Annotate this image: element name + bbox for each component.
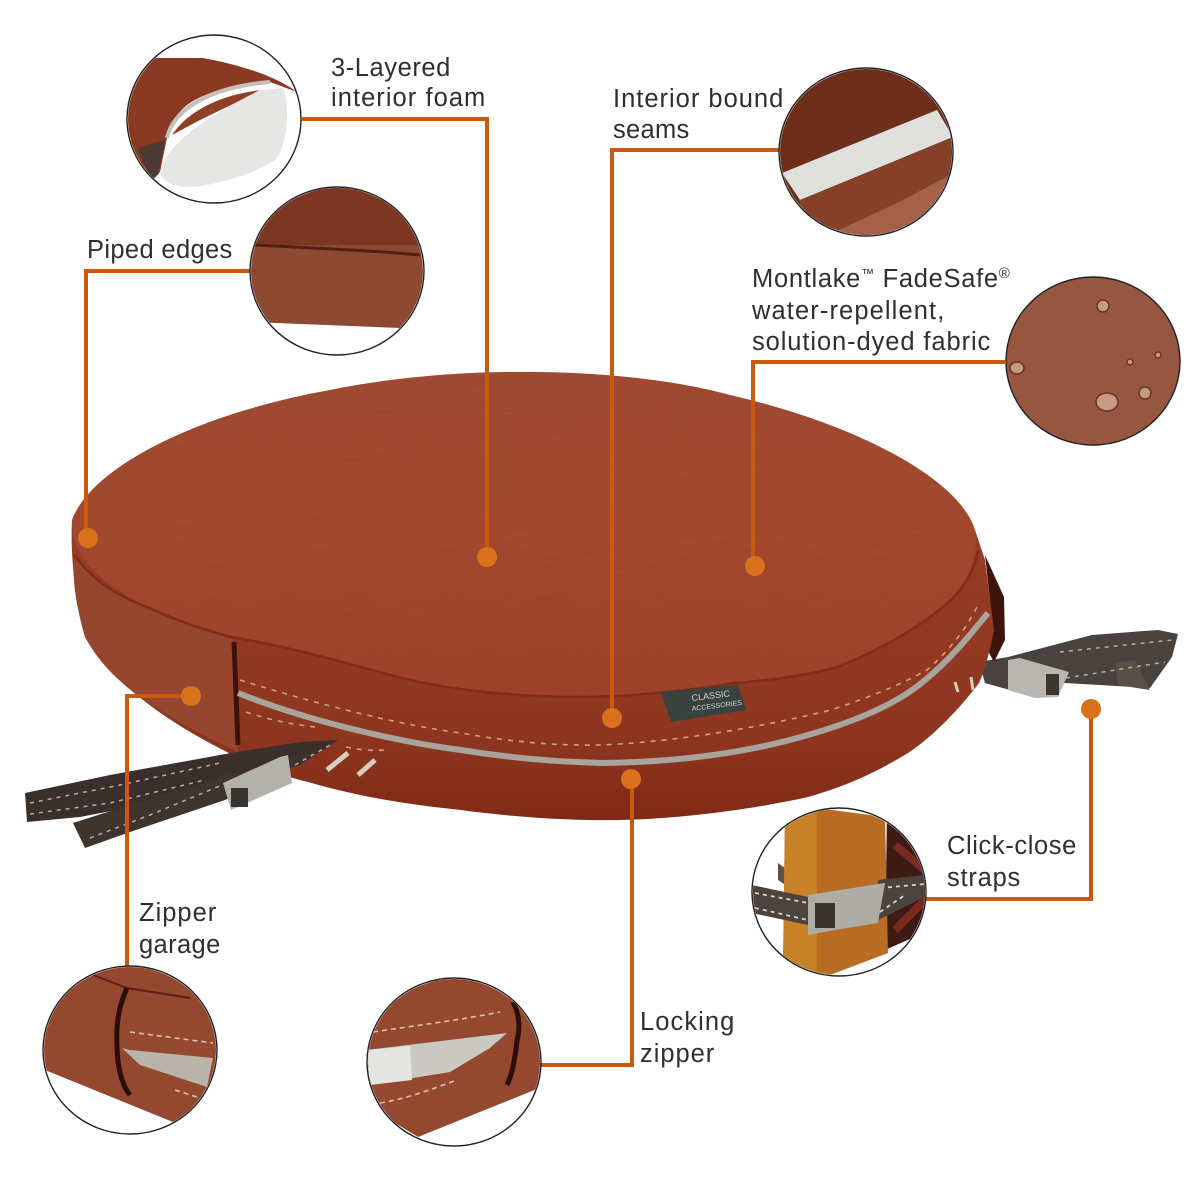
label: click-close straps: straps xyxy=(947,864,1021,892)
leader: interior bound seams xyxy=(602,150,779,728)
leader: locking zipper xyxy=(540,769,641,1065)
label: zipper garage: Zipper xyxy=(139,899,217,927)
label: locking zipper: zipper xyxy=(640,1040,715,1068)
detail circle: foam xyxy=(126,34,302,204)
detail circle: seams xyxy=(778,65,954,240)
leader: 3-layered foam xyxy=(302,119,497,567)
brand label xyxy=(661,685,746,722)
label: zipper garage: garage xyxy=(139,931,221,959)
label: fabric: FadeSafe xyxy=(875,265,999,293)
leader: piped edges xyxy=(78,271,250,548)
detail circle: locking zipper xyxy=(366,974,542,1149)
label: interior bound seams: Interior bound xyxy=(613,85,784,113)
label: 3-layered interior foam: interior foam xyxy=(331,84,486,112)
zipper pulls xyxy=(327,753,375,775)
detail circle: fabric xyxy=(1006,277,1180,445)
zipper xyxy=(238,613,988,763)
label: click-close straps: Click-close xyxy=(947,832,1077,860)
leader: fabric xyxy=(745,362,1005,576)
brand label: ACCESSORIES xyxy=(691,700,743,713)
label: fabric: ™ xyxy=(861,266,875,281)
label: fabric: ® xyxy=(999,265,1011,282)
right strap xyxy=(979,630,1178,698)
cushion top surface xyxy=(72,372,976,697)
label: locking zipper: Locking xyxy=(640,1008,735,1036)
right side dark gap xyxy=(982,555,1005,662)
label: fabric: water-repellent, xyxy=(751,297,945,325)
detail circle: piped edges xyxy=(250,185,425,360)
detail circle: zipper garage xyxy=(42,960,218,1137)
zipper garage flap xyxy=(73,555,238,752)
leader: click-close straps xyxy=(926,699,1101,899)
label: fabric: Montlake xyxy=(752,265,861,293)
left strap xyxy=(25,740,338,848)
label: interior bound seams: seams xyxy=(613,116,690,144)
piped edge xyxy=(74,550,978,697)
detail circle: straps xyxy=(750,805,930,980)
leader: zipper garage xyxy=(127,686,201,966)
stitching xyxy=(240,607,977,750)
cushion side wall xyxy=(72,520,994,820)
label: fabric: solution-dyed fabric xyxy=(752,328,991,356)
cushion with straps xyxy=(25,372,1178,848)
label: 3-layered interior foam: 3-Layered xyxy=(331,54,451,82)
label: piped edges: Piped edges xyxy=(87,236,233,264)
brand label: CLASSIC xyxy=(691,688,731,703)
